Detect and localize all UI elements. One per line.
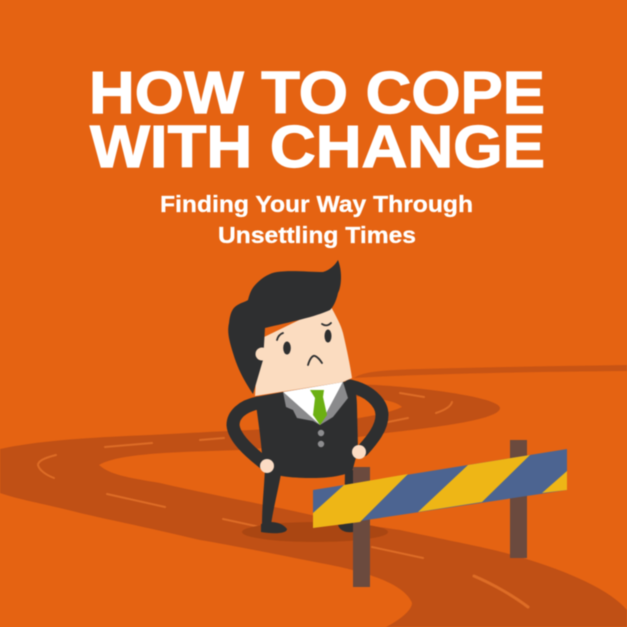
lapels	[283, 382, 348, 425]
barrier posts	[353, 467, 370, 587]
title	[89, 60, 545, 180]
barrier board	[313, 449, 567, 528]
subtitle	[160, 191, 473, 248]
hands	[260, 445, 366, 473]
buttons	[318, 430, 324, 447]
subtitle: Finding Your Way Through	[160, 191, 473, 217]
eyebrows and mouth	[277, 323, 331, 365]
ground shadow	[242, 522, 388, 542]
distant road strip	[354, 365, 627, 378]
title: WITH CHANGE	[90, 114, 545, 180]
hair	[228, 260, 341, 394]
face	[255, 305, 352, 396]
shirt	[283, 382, 343, 425]
jacket	[255, 380, 358, 478]
barrier stripes	[313, 455, 567, 528]
tie	[310, 390, 327, 425]
barrier	[313, 440, 567, 587]
subtitle: Unsettling Times	[218, 222, 416, 248]
businessman	[228, 260, 382, 533]
eyes	[283, 330, 332, 354]
title: HOW TO COPE	[89, 60, 545, 126]
legs	[261, 468, 356, 533]
ear	[256, 348, 268, 360]
winding road	[0, 384, 627, 627]
road markings	[38, 393, 528, 607]
arms	[233, 386, 382, 463]
